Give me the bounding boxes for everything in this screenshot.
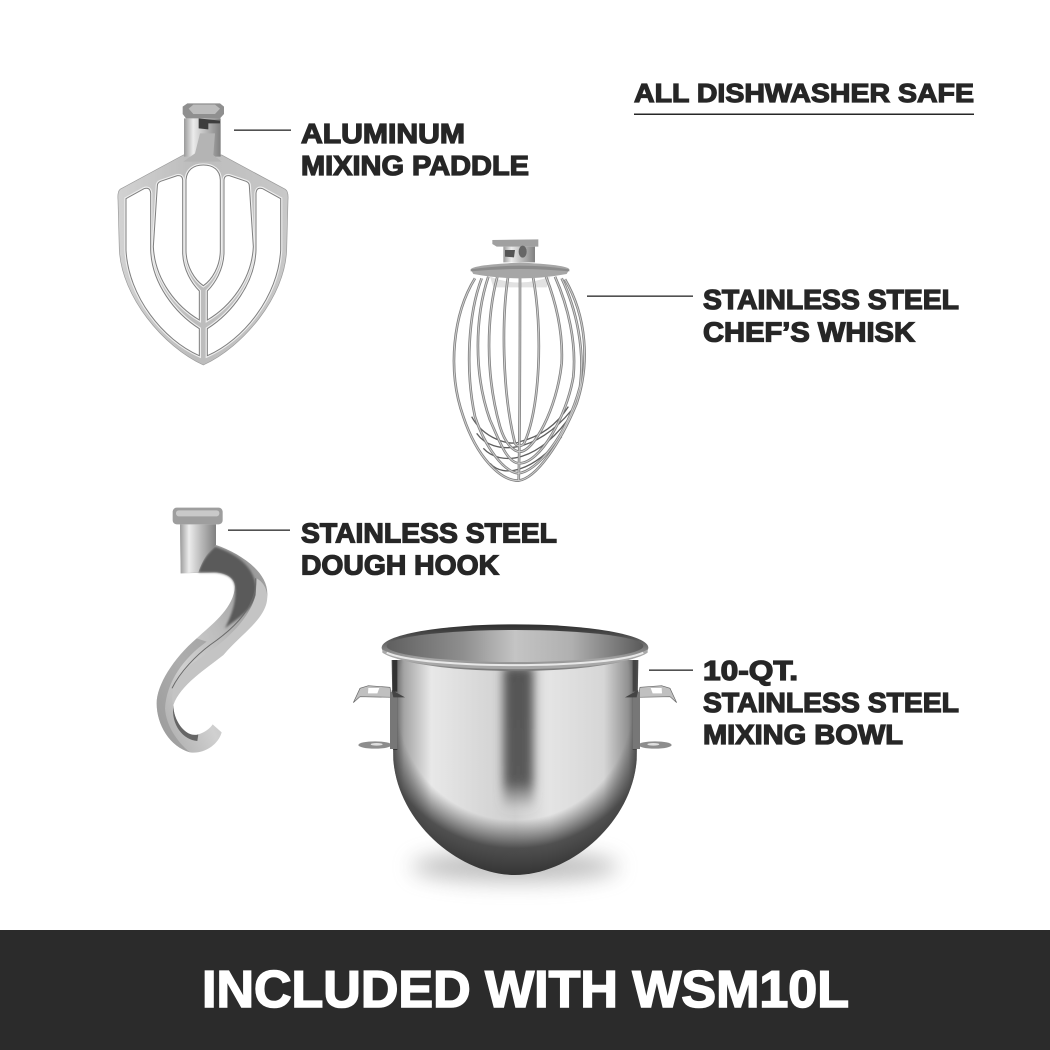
footer banner	[0, 930, 1050, 1050]
leader line: paddle	[234, 130, 291, 131]
leader line: hook	[228, 530, 290, 531]
label: 10-qt stainless steel mixing bowl: STAINLESS STEEL	[703, 687, 959, 718]
label: stainless steel dough hook	[301, 518, 557, 580]
label: aluminum mixing paddle	[301, 118, 529, 181]
icon: dough hook	[157, 508, 267, 753]
icon: wire whisk	[454, 239, 585, 481]
panel: stainless steel dough hook	[157, 508, 557, 753]
label: stainless steel dough hook: STAINLESS STEEL	[301, 518, 557, 548]
icon: mixing bowl	[353, 624, 677, 882]
icon: paddle beater	[118, 103, 288, 365]
label: stainless steel dough hook: DOUGH HOOK	[301, 550, 499, 580]
leader line: bowl	[649, 670, 693, 671]
label: 10-qt stainless steel mixing bowl: 10-QT.	[703, 655, 798, 686]
label: stainless steel chef's whisk: CHEF’S WHISK	[703, 316, 915, 348]
leader line: whisk	[587, 296, 693, 297]
label: 10-qt stainless steel mixing bowl	[703, 655, 959, 750]
panel: aluminum mixing paddle	[118, 103, 529, 365]
label: 10-qt stainless steel mixing bowl: MIXING BOWL	[703, 719, 903, 750]
banner title: INCLUDED WITH WSM10L	[202, 961, 849, 1019]
label: stainless steel chef's whisk: STAINLESS STEEL	[703, 284, 959, 315]
heading: all dishwasher safe: ALL DISHWASHER SAFE	[634, 78, 974, 108]
label: aluminum mixing paddle: MIXING PADDLE	[301, 150, 529, 181]
label: aluminum mixing paddle: ALUMINUM	[301, 118, 465, 149]
panel: stainless steel chef's whisk	[454, 239, 959, 481]
panel: 10-qt stainless steel mixing bowl	[353, 624, 959, 882]
label: stainless steel chef's whisk	[703, 284, 959, 348]
